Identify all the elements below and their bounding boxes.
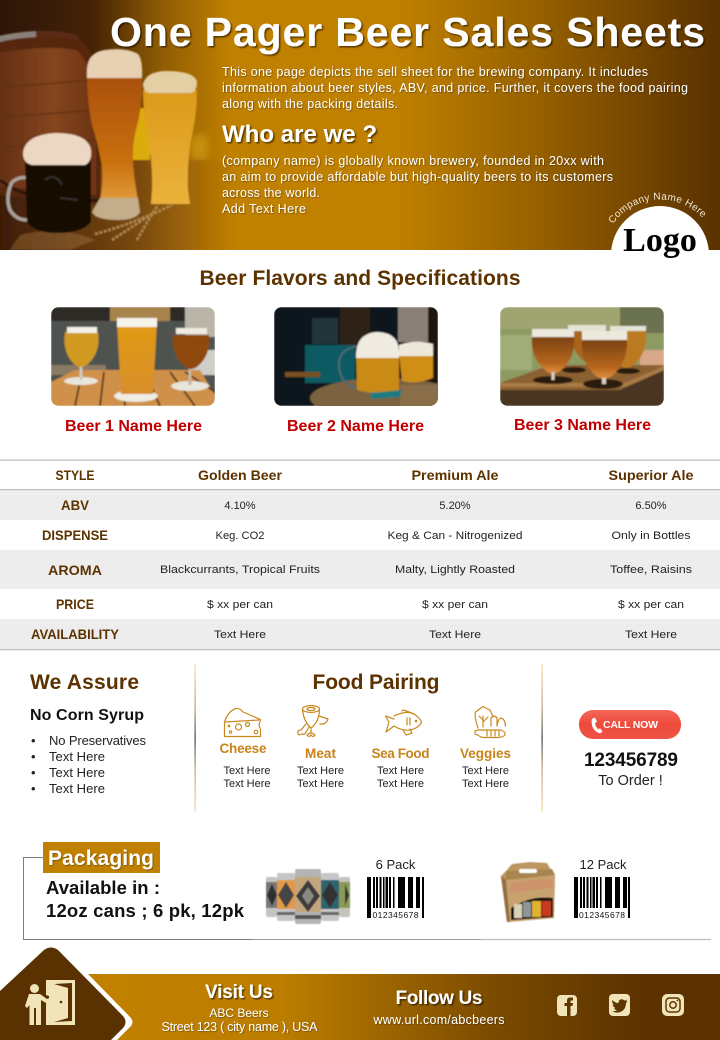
call now button: CALL NOW: [603, 719, 658, 731]
panel: we assure: •: [31, 749, 36, 764]
panel: we assure: We Assure: [30, 671, 139, 694]
icon: fish: [386, 710, 422, 735]
specifications table: $ xx per can: [207, 599, 273, 611]
specifications table: Keg. CO2: [216, 530, 264, 542]
visit us: [162, 982, 318, 1034]
beer names: Beer 3 Name Here: [514, 417, 651, 434]
text: cheese: Text Here: [224, 778, 270, 790]
company description: Add Text Here: [222, 202, 306, 216]
specifications table: Text Here: [214, 629, 266, 641]
visit us: Street 123 ( city name ), USA: [162, 1020, 318, 1034]
specifications table: Superior Ale: [608, 467, 694, 483]
pilsner glass: [143, 90, 197, 204]
title: One Pager Beer Sales Sheets: [110, 9, 705, 55]
dark mug: [8, 178, 27, 220]
follow us: [372, 988, 504, 1027]
label: meat: Meat: [305, 746, 336, 761]
specifications table: 5.20%: [439, 500, 471, 512]
icon: twitter: [609, 994, 630, 1016]
photo: beer 1: [51, 307, 215, 406]
section heading: beer flavors: Beer Flavors and Specifications: [200, 267, 520, 290]
company badge circle: [611, 206, 709, 250]
intro text: [222, 65, 688, 111]
barcode: 12 pack: 012345678: [579, 910, 625, 920]
intro text: information about beer styles, ABV, and price. Further, it covers the food pairing: [222, 81, 688, 95]
packaging text: Available in :: [46, 877, 160, 898]
specifications table: STYLE: [56, 467, 94, 483]
panel: we assure: Text Here: [49, 749, 105, 764]
company name curved: Company Name Here: [609, 192, 706, 222]
image: 12 pack box: [501, 862, 555, 922]
company description: (company name) is globally known brewery, founded in 20xx with: [222, 154, 604, 168]
company description: [222, 154, 613, 216]
text: veggies: Text Here: [462, 778, 509, 790]
specifications table: $ xx per can: [618, 599, 684, 611]
text: sea food: [377, 765, 424, 790]
company description: an aim to provide affordable but high-quality beers to its customers: [222, 170, 613, 184]
beer names: [65, 417, 651, 435]
icon: person at door: [25, 980, 75, 1025]
text: veggies: Text Here: [462, 765, 509, 777]
specifications table: Golden Beer: [198, 467, 283, 483]
label: sea food: Sea Food: [372, 746, 430, 761]
label: 12 pack: 12 Pack: [580, 857, 627, 872]
barcode: 6 pack: 012345678: [372, 910, 419, 920]
packaging frame: [24, 858, 711, 940]
panel: we assure: •: [31, 765, 36, 780]
text: meat: [297, 765, 344, 790]
specifications table: 6.50%: [635, 500, 667, 512]
heading: who are we: Who are we ?: [222, 121, 377, 148]
text: meat: Text Here: [297, 765, 344, 777]
panel: we assure: •: [31, 781, 36, 796]
text: cheese: [224, 765, 270, 790]
panel: we assure: No Preservatives: [49, 733, 146, 748]
panel: we assure: Text Here: [49, 781, 105, 796]
specifications table: Premium Ale: [412, 467, 499, 483]
specifications table: $ xx per can: [422, 599, 488, 611]
beer names: Beer 2 Name Here: [287, 418, 424, 435]
visit us: Visit Us: [205, 982, 273, 1003]
packaging heading: Packaging: [48, 847, 154, 870]
text: sea food: Text Here: [377, 765, 424, 777]
phone number: 123456789: [584, 750, 678, 771]
specifications table: Only in Bottles: [612, 530, 691, 542]
header photo: barrel and beer glasses: [0, 34, 235, 250]
footer diamond badge: [0, 948, 132, 1040]
panel: we assure: No Corn Syrup: [30, 707, 144, 724]
visit us: ABC Beers: [209, 1006, 269, 1020]
label: 6 pack: 6 Pack: [376, 857, 416, 872]
specifications table: 4.10%: [224, 500, 256, 512]
heading: food pairing: Food Pairing: [312, 671, 440, 694]
wheat: [95, 205, 172, 240]
logo: Logo: [623, 222, 697, 259]
icon: cheese: [224, 708, 260, 736]
icon: instagram: [662, 994, 684, 1016]
panel: we assure: Text Here: [49, 765, 105, 780]
label: veggies: Veggies: [460, 746, 511, 761]
specifications table: Keg & Can - Nitrogenized: [388, 530, 522, 542]
header banner: [0, 0, 720, 250]
call now button: [579, 710, 681, 739]
specifications table: Blackcurrants, Tropical Fruits: [160, 564, 321, 576]
specifications table: Text Here: [429, 629, 481, 641]
specifications table: AVAILABILITY: [31, 626, 120, 642]
specifications table: DISPENSE: [42, 527, 108, 543]
text: cheese: Text Here: [224, 765, 270, 777]
follow us: www.url.com/abcbeers: [372, 1013, 504, 1027]
label: cheese: Cheese: [220, 741, 267, 756]
barcode: 12 pack: [574, 877, 630, 920]
intro text: along with the packing details.: [222, 97, 398, 111]
specifications table: AROMA: [48, 562, 102, 578]
company description: across the world.: [222, 186, 320, 200]
specifications table: ABV: [61, 497, 90, 513]
text: veggies: [462, 765, 509, 790]
panel: we assure: [30, 671, 146, 796]
packaging text: [46, 877, 245, 921]
beer names: Beer 1 Name Here: [65, 418, 202, 435]
text: meat: Text Here: [297, 778, 344, 790]
specifications table: Toffee, Raisins: [610, 564, 693, 576]
photo: beer 2: [274, 307, 438, 406]
specifications table: [0, 460, 720, 650]
image: cans: [266, 869, 350, 924]
text: sea food: Text Here: [377, 778, 424, 790]
tall glass: [87, 76, 142, 200]
footer band: [88, 974, 720, 1040]
intro text: This one page depicts the sell sheet for the brewing company. It includes: [222, 65, 648, 79]
panel: we assure: •: [31, 733, 36, 748]
barcode: 6 pack: [367, 877, 424, 920]
specifications table: Text Here: [625, 629, 677, 641]
icon: veggies: [475, 706, 506, 738]
packaging heading: [43, 842, 160, 873]
icon: meat: [298, 706, 328, 736]
packaging text: 12oz cans ; 6 pk, 12pk: [46, 900, 245, 921]
specifications table: PRICE: [56, 596, 94, 612]
icon: facebook: [557, 995, 577, 1016]
specifications table: Malty, Lightly Roasted: [395, 564, 515, 576]
follow us: Follow Us: [396, 988, 482, 1009]
photo: beer 3: [500, 307, 664, 406]
to order: To Order !: [598, 773, 663, 789]
